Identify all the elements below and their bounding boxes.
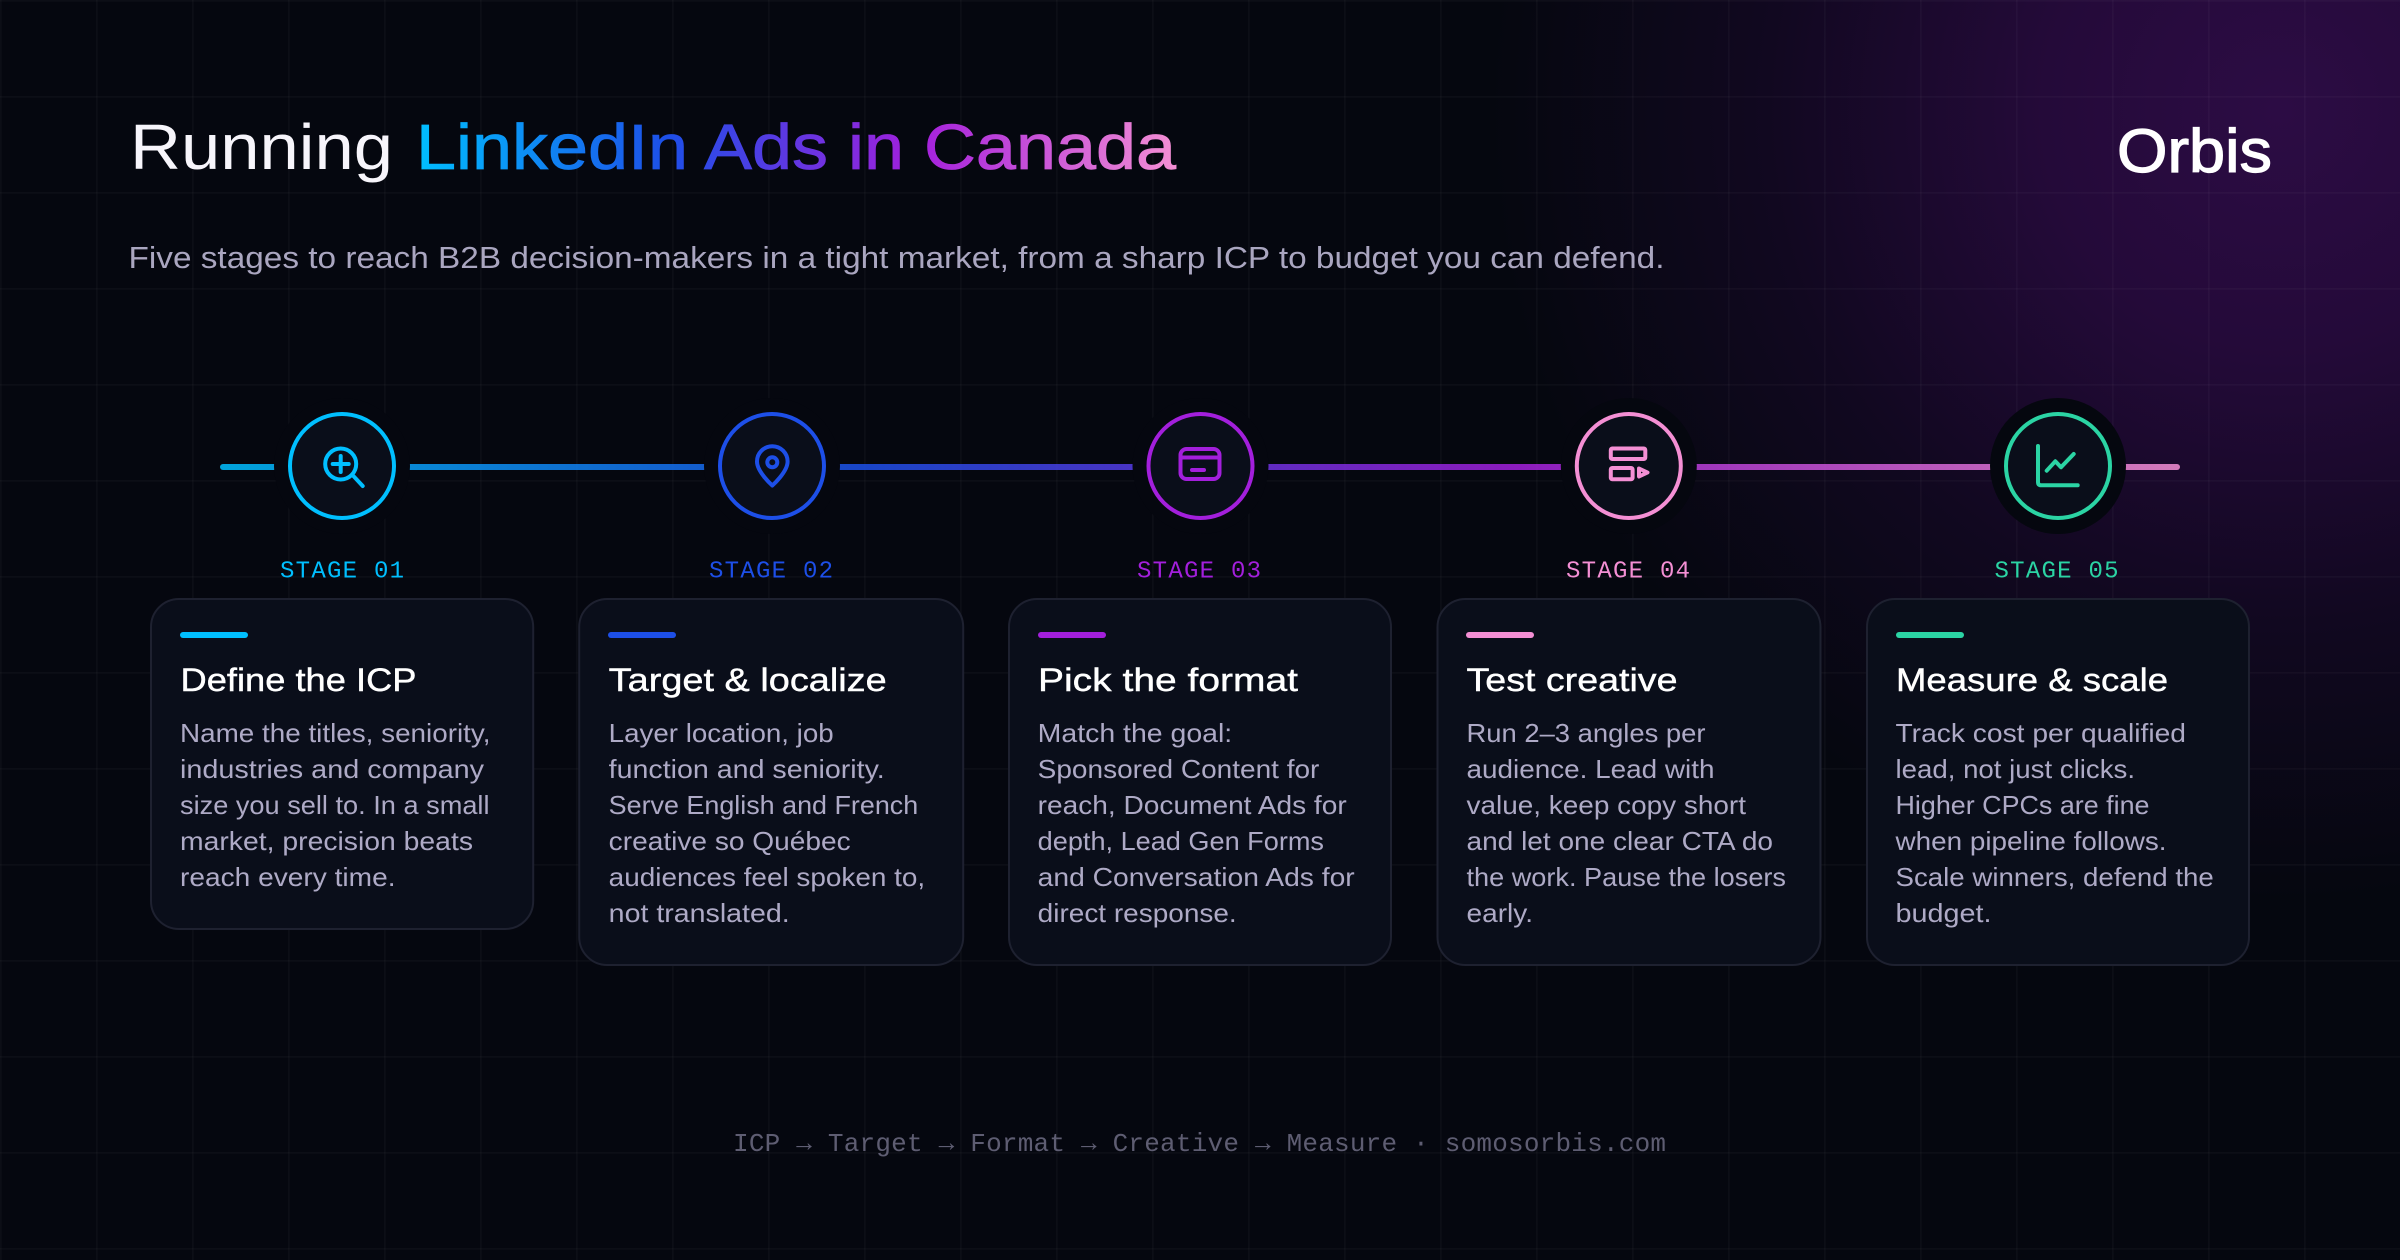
- stage labels: [280, 558, 2118, 586]
- panel: define the ICP: industries and company: [180, 754, 484, 784]
- panel: define the ICP: reach every time.: [180, 862, 396, 892]
- subtitle: Five stages to reach B2B decision-makers in a tight market, from a sharp ICP to budget you can defend.: [128, 240, 1664, 275]
- panel: measure and scale: Measure & scale: [1896, 662, 2168, 698]
- panel: measure and scale: budget.: [1896, 898, 1992, 928]
- panel: pick the format: and Conversation Ads for: [1038, 862, 1355, 892]
- panel: test creative: audience. Lead with: [1466, 754, 1714, 784]
- stage labels: STAGE 01: [280, 558, 404, 586]
- title: Running: [130, 111, 393, 183]
- panel: define the ICP: Define the ICP: [180, 662, 416, 698]
- stage 5 node: [1990, 398, 2126, 534]
- panel: target and localize: Target & localize: [609, 662, 887, 698]
- panel: target and localize: audiences feel spoken to,: [609, 862, 925, 892]
- stage labels: STAGE 04: [1566, 558, 1690, 586]
- panel: measure and scale: Higher CPCs are fine: [1896, 790, 2150, 820]
- panel: define the ICP: Name the titles, seniority,: [180, 718, 490, 748]
- stage labels: STAGE 05: [1994, 558, 2118, 586]
- icon: layout with play: [1611, 448, 1648, 479]
- logo: Orbis: Orbis: [2117, 117, 2272, 185]
- panel: test creative: [1438, 599, 1820, 965]
- icon: card: [1180, 449, 1220, 479]
- icon: magnifier with plus: [325, 448, 363, 486]
- panel: target and localize: creative so Québec: [609, 826, 851, 856]
- stage labels: STAGE 02: [709, 558, 833, 586]
- panel: target and localize: [579, 599, 963, 965]
- panel: target and localize: function and seniority.: [609, 754, 885, 784]
- panel: pick the format: direct response.: [1038, 898, 1237, 928]
- panel: measure and scale: [1867, 599, 2249, 965]
- panel: test creative: the work. Pause the losers: [1466, 862, 1786, 892]
- panel: target and localize: not translated.: [609, 898, 790, 928]
- panel: pick the format: Pick the format: [1038, 662, 1298, 698]
- footer: ICP → Target → Format → Creative → Measure · somosorbis.com: [733, 1129, 1666, 1159]
- panel: measure and scale: Track cost per qualified: [1896, 718, 2186, 748]
- panel: pick the format: reach, Document Ads for: [1038, 790, 1347, 820]
- panel: target and localize: Serve English and French: [609, 790, 918, 820]
- icon: map pin: [757, 446, 788, 486]
- panel: test creative: Run 2–3 angles per: [1466, 718, 1706, 748]
- icon: line chart: [2038, 446, 2078, 485]
- panel: define the ICP: size you sell to. In a small: [180, 790, 490, 820]
- timeline connector line: [220, 464, 2180, 470]
- panel: test creative: early.: [1466, 898, 1533, 928]
- panel: target and localize: Layer location, job: [609, 718, 834, 748]
- stage labels: STAGE 03: [1137, 558, 1261, 586]
- panel: pick the format: Match the goal:: [1038, 718, 1232, 748]
- panel: test creative: and let one clear CTA do: [1466, 826, 1773, 856]
- stage 1 node: [274, 398, 410, 534]
- panel: measure and scale: when pipeline follows.: [1894, 826, 2166, 856]
- panel: measure and scale: lead, not just clicks.: [1896, 754, 2135, 784]
- panel: test creative: Test creative: [1466, 662, 1678, 698]
- stage 3 node: [1132, 398, 1268, 534]
- stage 2 node: [704, 398, 840, 534]
- panel: test creative: value, keep copy short: [1466, 790, 1747, 820]
- panel: define the ICP: [151, 599, 533, 929]
- panel: measure and scale: Scale winners, defend the: [1896, 862, 2214, 892]
- panel: pick the format: [1009, 599, 1391, 965]
- title: LinkedIn Ads in Canada: [416, 111, 1176, 183]
- panel: pick the format: Sponsored Content for: [1038, 754, 1320, 784]
- panel: define the ICP: market, precision beats: [180, 826, 473, 856]
- title: [130, 111, 1176, 183]
- panel: pick the format: depth, Lead Gen Forms: [1038, 826, 1324, 856]
- stage 4 node: [1561, 398, 1697, 534]
